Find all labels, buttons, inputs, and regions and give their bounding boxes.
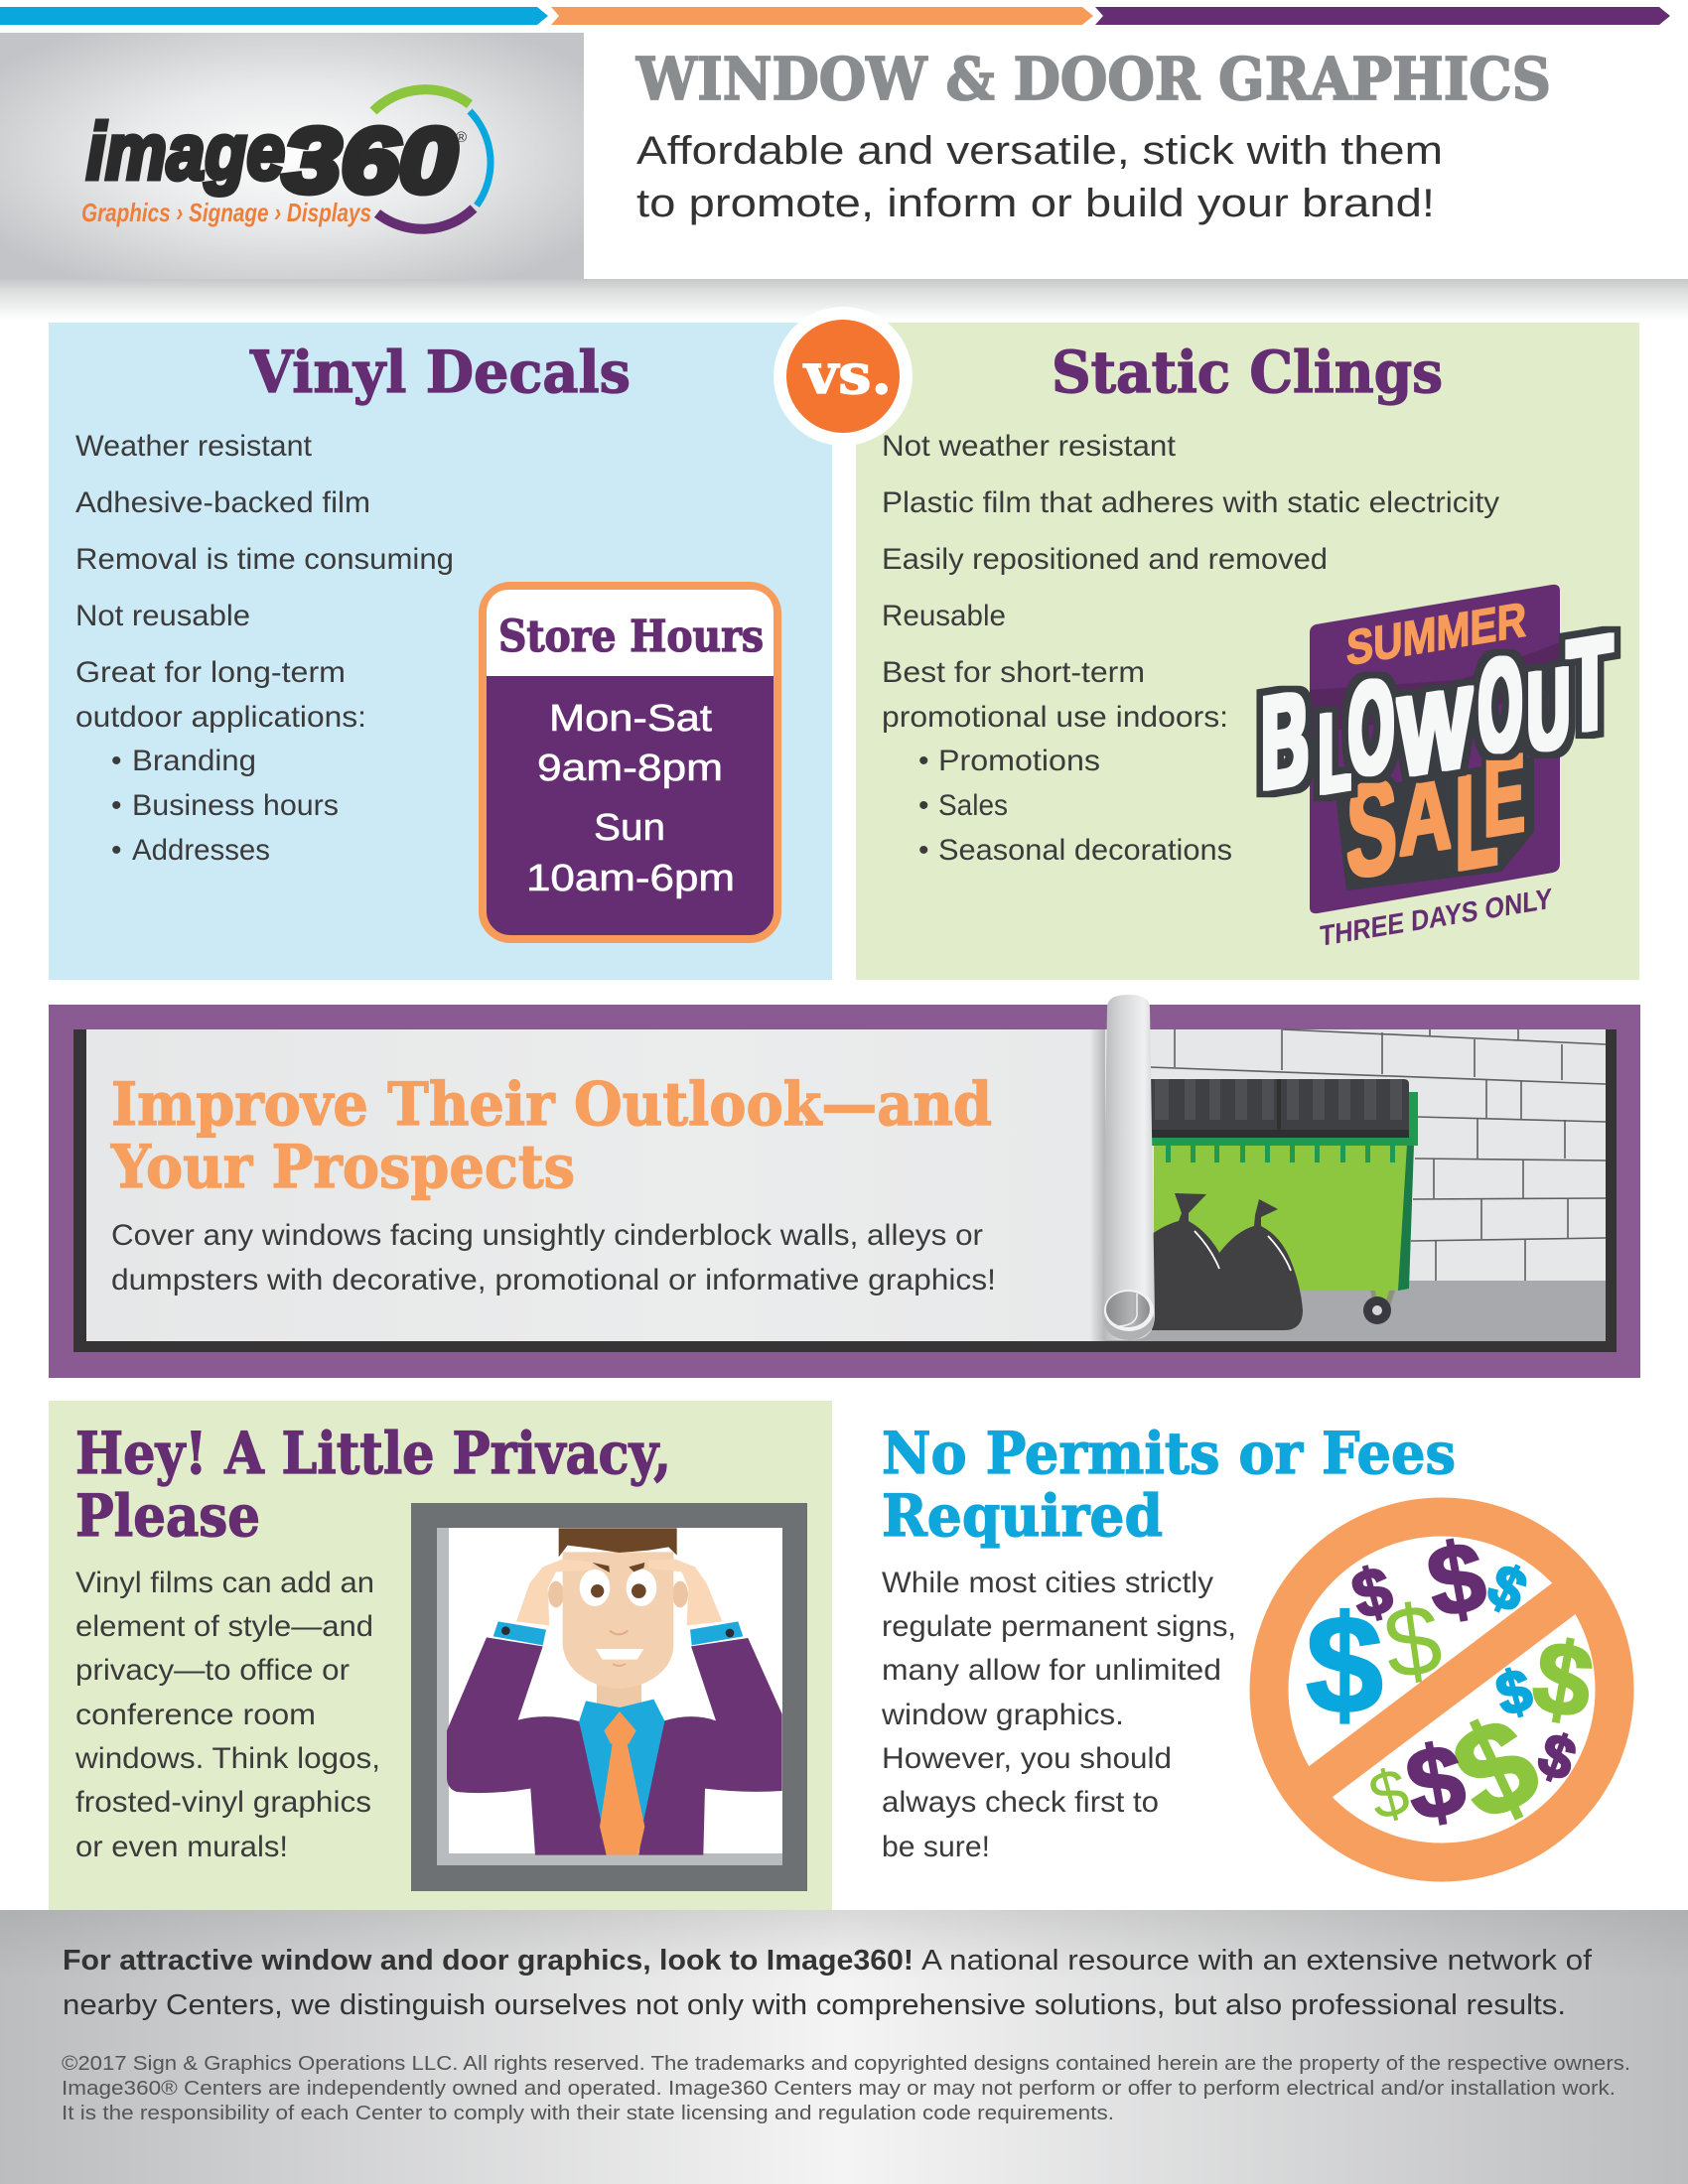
permits heading	[882, 1420, 1456, 1550]
static cling feature list: Sales	[938, 789, 1008, 822]
word: sale: A	[1399, 751, 1452, 880]
dollar signs: $	[1377, 1583, 1448, 1701]
outlook heading	[110, 1070, 992, 1202]
subtitle	[636, 129, 1443, 225]
privacy body text: windows. Think logos,	[74, 1742, 380, 1775]
permits body text: window graphics.	[881, 1699, 1124, 1731]
footer band	[0, 1910, 1688, 2184]
vinyl decal feature list	[75, 430, 454, 867]
word: sale: S	[1346, 749, 1397, 907]
man: tie	[600, 1711, 644, 1855]
word: sale: L	[1455, 743, 1498, 899]
vs badge	[774, 307, 913, 446]
illustration: man peering through window	[411, 1503, 807, 1891]
footer message	[63, 1945, 1593, 2021]
static cling feature list: Reusable	[882, 600, 1006, 632]
header shadow	[0, 279, 1688, 320]
vinyl decal feature list: Weather resistant	[75, 430, 313, 463]
prohibition ring and bar	[1269, 1517, 1615, 1862]
paper sheet	[86, 1029, 1105, 1341]
word: blowout: O	[1348, 651, 1394, 805]
man: eyes	[580, 1563, 656, 1606]
panel: no permits	[881, 1420, 1615, 1863]
static cling feature list: •	[918, 789, 929, 822]
vinyl decal feature list: Addresses	[132, 834, 270, 867]
vinyl decal feature list: •	[111, 834, 122, 867]
man: hands	[516, 1560, 722, 1625]
man: cuffs	[493, 1621, 743, 1645]
panel: static clings	[856, 323, 1639, 980]
permits body text: many allow for unlimited	[882, 1654, 1221, 1687]
panel: privacy	[49, 1401, 832, 1910]
outlook body text: Cover any windows facing unsightly cinderblock walls, alleys or	[111, 1219, 983, 1252]
logo wordmark: image	[86, 107, 285, 196]
logo wordmark: ®	[456, 129, 467, 146]
legal disclaimer: Image360® Centers are independently owned and operated. Image360 Centers may or may not perform or offer to perform electrical and/or installation work.	[62, 2078, 1616, 2100]
dollar signs: $	[1344, 1552, 1400, 1634]
brick wall lines	[1150, 1029, 1606, 1281]
privacy body text: conference room	[75, 1699, 316, 1731]
static cling feature list: Promotions	[938, 745, 1100, 777]
word: blowout: U	[1527, 644, 1570, 775]
man: shirt	[579, 1700, 664, 1824]
subtitle: Affordable and versatile, stick with them	[636, 129, 1443, 173]
dollar signs: $	[1489, 1656, 1539, 1728]
word: blowout: T	[1567, 608, 1613, 761]
vinyl decal feature list: Branding	[132, 745, 256, 777]
darker band behind blowout	[1310, 642, 1560, 735]
privacy heading: Please	[75, 1482, 260, 1550]
vinyl decal feature list: Removal is time consuming	[75, 543, 454, 576]
word: sale: E	[1483, 730, 1525, 861]
vinyl decal feature list: outdoor applications:	[75, 701, 366, 734]
word: blowout	[1261, 608, 1613, 818]
vinyl decal feature list: •	[111, 745, 122, 777]
vinyl decal feature list: •	[111, 789, 122, 822]
privacy body text	[74, 1567, 380, 1863]
footer message: A national resource with an extensive network of	[921, 1945, 1593, 1977]
static cling feature list: Best for short-term	[882, 656, 1145, 689]
word: blowout: B	[1261, 664, 1309, 818]
outlook heading: Your Prospects	[110, 1133, 575, 1202]
static cling feature list: Not weather resistant	[882, 430, 1177, 463]
permits body text	[881, 1567, 1236, 1863]
dollar signs: $	[1530, 1719, 1584, 1794]
subtitle: to promote, inform or build your brand!	[636, 182, 1435, 225]
footer message: nearby Centers, we distinguish ourselves not only with comprehensive solutions, but also professional results.	[63, 1989, 1566, 2021]
vinyl decal feature list: Adhesive-backed film	[75, 486, 370, 519]
vinyl decal feature list: Not reusable	[75, 600, 250, 632]
static cling feature list: •	[918, 745, 929, 777]
paper roll	[1102, 995, 1155, 1340]
permits heading: No Permits or Fees	[882, 1420, 1456, 1487]
logo wordmark: 360	[283, 110, 457, 211]
dollar signs	[1306, 1520, 1601, 1849]
outlook body text	[111, 1219, 996, 1297]
dollar signs: $	[1361, 1753, 1417, 1836]
heading: vinyl decals: Vinyl Decals	[249, 339, 631, 406]
sign hours	[526, 698, 735, 899]
dollar signs: $	[1398, 1723, 1473, 1843]
man: neck	[597, 1675, 641, 1710]
dumpster caster	[1363, 1291, 1395, 1324]
dumpster lid	[1142, 1079, 1409, 1138]
privacy body text: Vinyl films can add an	[75, 1567, 374, 1599]
dollar signs: $	[1525, 1618, 1601, 1740]
three days only: THREE DAYS ONLY	[1320, 884, 1552, 953]
permits body text: However, you should	[882, 1742, 1172, 1775]
heading: static clings: Static Clings	[1052, 339, 1443, 406]
dollar signs: $	[1433, 1688, 1559, 1849]
dumpster ribs	[1166, 1145, 1395, 1162]
logo panel	[0, 33, 584, 279]
sign hours: 9am-8pm	[537, 748, 723, 789]
man: face	[563, 1552, 673, 1689]
word: sale	[1346, 730, 1525, 907]
outlook body text: dumpsters with decorative, promotional or informative graphics!	[111, 1264, 996, 1297]
top chevron bars	[0, 7, 1670, 25]
permits body text: While most cities strictly	[882, 1567, 1213, 1599]
summer blowout sale sign	[1261, 585, 1613, 953]
permits body text: regulate permanent signs,	[882, 1610, 1236, 1643]
man: nose and mouth	[596, 1631, 643, 1666]
panel: improve their outlook	[49, 995, 1640, 1378]
man: ears	[548, 1581, 688, 1607]
sign hours: Mon-Sat	[549, 698, 712, 740]
privacy body text: element of style—and	[75, 1610, 373, 1643]
logo ring	[373, 89, 491, 229]
man: jacket	[447, 1637, 782, 1855]
sign hours: Sun	[594, 807, 665, 849]
outlook heading: Improve Their Outlook—and	[111, 1070, 992, 1140]
privacy body text: or even murals!	[75, 1831, 288, 1863]
legal disclaimer	[62, 2053, 1630, 2124]
permits body text: always check first to	[882, 1786, 1159, 1819]
word: blowout: W	[1398, 663, 1472, 800]
panel: vinyl decals	[49, 323, 832, 980]
word: summer: SUMMER	[1346, 593, 1526, 676]
shadow behind sale lettering	[1336, 756, 1534, 890]
vinyl decal feature list: Business hours	[132, 789, 339, 822]
footer message: For attractive window and door graphics, look to Image360!	[63, 1945, 914, 1977]
man: hair	[559, 1528, 677, 1557]
word: blowout: O	[1478, 629, 1522, 782]
dollar signs: $	[1420, 1520, 1493, 1639]
legal disclaimer: ©2017 Sign & Graphics Operations LLC. All rights reserved. The trademarks and copyrighted designs contained herein are the property of the respective owners.	[62, 2053, 1630, 2075]
static cling feature list: Plastic film that adheres with static electricity	[882, 486, 1499, 519]
static cling feature list	[882, 430, 1499, 867]
permits heading: Required	[882, 1482, 1163, 1550]
sign hours: 10am-6pm	[526, 858, 735, 899]
privacy body text: frosted-vinyl graphics	[75, 1786, 371, 1819]
dumpster	[1142, 1079, 1418, 1324]
title: WINDOW & DOOR GRAPHICS	[635, 45, 1551, 113]
privacy heading: Hey! A Little Privacy,	[75, 1420, 671, 1487]
logo wordmark	[86, 107, 467, 211]
alley scene	[1092, 1029, 1606, 1341]
dollar signs: $	[1306, 1586, 1383, 1742]
vinyl decal feature list: Great for long-term	[75, 656, 346, 689]
static cling feature list: •	[918, 834, 929, 867]
store hours sign	[483, 586, 777, 939]
dollar signs: $	[1478, 1551, 1536, 1625]
trash bags	[1152, 1193, 1303, 1330]
legal disclaimer: It is the responsibility of each Center to comply with their state licensing and regulation code requirements.	[62, 2103, 1114, 2124]
static cling feature list: Easily repositioned and removed	[882, 543, 1328, 576]
vs badge: vs.	[802, 341, 892, 407]
sign heading: Store Hours	[498, 612, 764, 662]
logo tagline: Graphics › Signage › Displays	[81, 198, 371, 227]
permits body text: be sure!	[882, 1831, 990, 1863]
word: blowout: L	[1319, 687, 1350, 817]
static cling feature list: Seasonal decorations	[938, 834, 1232, 867]
static cling feature list: promotional use indoors:	[882, 701, 1228, 734]
privacy body text: privacy—to office or	[75, 1654, 350, 1687]
privacy heading	[75, 1420, 671, 1550]
icon: no money sign	[1269, 1517, 1615, 1862]
